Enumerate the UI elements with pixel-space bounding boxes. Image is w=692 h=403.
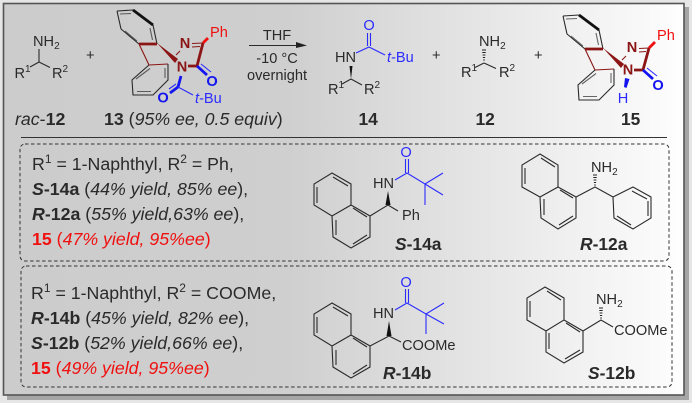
results text a: R [32,154,45,174]
results text a: 15 (47% yield, 95%ee) [32,229,211,249]
product 12 [461,34,516,81]
reaction arrow with conditions: overnight [247,68,307,84]
reactant rac-12: R [52,66,63,82]
reagent 13: O [206,74,218,90]
results text a: 2 [180,152,187,166]
structure S-14a: HN [373,176,394,192]
product 12: R [499,65,510,81]
structure S-14a: Ph [402,208,420,224]
results text a: 1 [45,152,52,166]
structure S-12b: 2 [617,299,623,310]
reactant rac-12: 2 [54,41,60,52]
reaction arrow with conditions: THF [263,28,291,44]
results text b: R [31,283,44,303]
product 14: O [363,18,375,34]
structure R-14b: O [400,275,412,291]
results text a: = 1-Naphthyl, R [52,154,180,174]
results text b: 2 [179,281,186,295]
compound labels: 15 [621,109,641,129]
reactant rac-12: NH [33,34,54,50]
results text b [31,281,276,378]
plus sign: + [86,48,95,64]
results text a: S-14a (44% yield, 85% ee), [32,179,248,199]
compound labels: rac-12 [15,109,65,129]
reagent 13: N [180,36,190,52]
structure S-14a [314,145,443,254]
product 15: O [652,78,664,94]
reagent 13: O [157,90,169,106]
panel: substrate b [21,266,672,387]
reagent 13: Ph [210,25,228,41]
results text b: R-14b (45% yield, 82% ee), [31,308,249,328]
reactant rac-12: 2 [63,64,69,75]
product 12: NH [479,34,500,50]
structure S-12b [527,287,668,383]
product 12: R [461,65,472,81]
product 14 [328,18,414,98]
reaction arrow with conditions: -10 °C [256,51,298,67]
structure S-12b: COOMe [614,323,668,339]
product 14: R [364,82,375,98]
product 15 [563,15,675,107]
structure R-12a: R-12a [580,234,628,254]
structure R-12a: NH [591,160,612,176]
reagent 13: N [177,60,187,76]
structure R-14b: COOMe [402,338,456,354]
product 14: 2 [375,80,381,91]
product 14: 1 [339,80,345,91]
results text b: 1 [44,281,51,295]
structure R-14b [314,275,456,383]
structure R-12a: 2 [612,167,618,178]
results text a [32,152,248,249]
compound labels [15,109,641,129]
structure S-12b: S-12b [588,363,635,383]
compound labels: 12 [476,109,495,129]
product 15: H [618,91,628,107]
reagent 13: t-Bu [195,91,222,107]
product 15: N [623,62,633,78]
reactant rac-12: R [14,66,25,82]
results text b: = COOMe, [186,283,276,303]
reagent 13 [117,10,228,107]
product 14: R [328,82,339,98]
product 12: 2 [500,41,506,52]
compound labels: 13 (95% ee, 0.5 equiv) [104,109,283,129]
structure R-12a [522,154,651,254]
product 15: N [627,40,637,56]
compound labels: 14 [358,109,378,129]
structure R-14b: R-14b [383,363,431,383]
product 14: t-Bu [387,50,414,66]
results text a: = Ph, [187,154,234,174]
plus sign: + [432,48,441,64]
plus sign: + [534,48,543,64]
results text a: R-12a (55% yield,63% ee), [32,204,244,224]
structure S-12b: NH [596,292,617,308]
results text b: = 1-Naphthyl, R [51,283,179,303]
product 12: 2 [510,63,516,74]
structure S-14a: S-14a [395,234,442,254]
product 12: 1 [472,63,478,74]
results text b: 15 (49% yield, 95%ee) [31,358,210,378]
results text b: S-12b (52% yield,66% ee), [31,333,243,353]
structure S-14a: O [400,145,412,161]
structure R-14b: HN [373,306,394,322]
reactant rac-12: 1 [25,64,31,75]
reactant rac-12 [14,34,69,82]
product 15: Ph [657,28,675,44]
panel: substrate a [20,144,669,261]
product 14: HN [335,50,356,66]
reaction arrow with conditions [247,28,307,84]
